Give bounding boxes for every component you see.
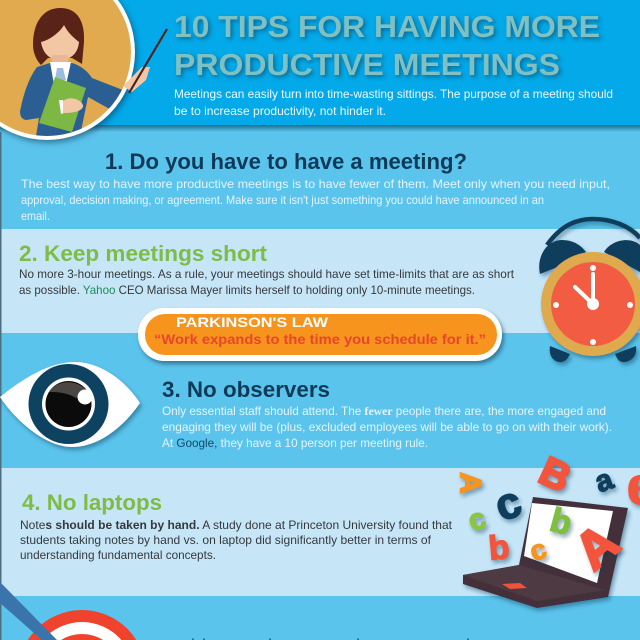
text: tip 3 body: At Google, they have a 10 person per meeting rule. xyxy=(162,436,428,450)
text: tip 4 body: understanding fundamental concepts. xyxy=(20,548,216,562)
heading: tip 1: 1. Do you have to have a meeting? xyxy=(105,149,467,174)
text: tip 3 body xyxy=(162,404,612,450)
text: tip 1 body: The best way to have more productive meetings is to have fewer of them. Meet only when you need input, xyxy=(21,177,610,191)
icon: laptop with flying letters: a xyxy=(591,463,618,499)
icon: laptop with flying letters: c xyxy=(488,477,528,531)
intro text: be to increase productivity, not hinder it. xyxy=(174,104,386,118)
icon: presenter woman with pointer xyxy=(0,0,167,140)
icon: alarm clock xyxy=(539,219,640,362)
icon: laptop with flying letters: b xyxy=(487,528,511,568)
text: tip 4 body: Notes should be taken by hand. A study done at Princeton University found that xyxy=(20,518,453,532)
text: tip 1 body xyxy=(21,177,610,223)
icon: laptop with flying letters: B xyxy=(533,449,577,501)
intro text: Meetings can easily turn into time-wasting sittings. The purpose of a meeting should xyxy=(174,87,613,101)
title xyxy=(174,9,600,82)
callout: Parkinson's Law xyxy=(138,308,502,361)
title: 10 TIPS FOR HAVING MORE xyxy=(174,9,600,44)
title: PRODUCTIVE MEETINGS xyxy=(174,47,560,82)
icon: laptop with flying letters: c xyxy=(464,502,490,538)
callout: Parkinson's Law: PARKINSON'S LAW xyxy=(176,314,329,330)
heading: tip 4: 4. No laptops xyxy=(22,490,162,515)
icon: laptop with flying letters: A xyxy=(454,472,486,494)
icon: laptop with flying letters: c xyxy=(525,533,551,567)
icon: laptop with flying letters: b xyxy=(546,501,576,543)
text: tip 4 body: students taking notes by hand vs. on laptop did significantly better in terms of xyxy=(20,533,432,547)
heading: tip 3: 3. No observers xyxy=(162,377,330,402)
icon: laptop with flying letters: A xyxy=(564,513,630,581)
callout: Parkinson's Law: “Work expands to the time you schedule for it.” xyxy=(154,331,486,347)
text: tip 1 body: email. xyxy=(21,209,50,223)
heading: tip 5 cropped at page edge xyxy=(192,638,469,640)
text: tip 1 body: approval, decision making, or agreement. Make sure it isn't just something you could have announced in an xyxy=(21,193,544,207)
panel: header band xyxy=(0,0,640,132)
icon: eye xyxy=(0,362,140,447)
text: tip 2 body: No more 3-hour meetings. As a rule, your meetings should have set time-limits that are as short xyxy=(19,267,515,281)
text: tip 3 body: engaging they will be (plus, excluded employees will be able to go on with their work). xyxy=(162,420,612,434)
heading: tip 2: 2. Keep meetings short xyxy=(19,241,268,266)
icon: laptop with flying letters xyxy=(454,449,640,608)
text: tip 4 body xyxy=(20,518,453,562)
icon: target with arrow shaft xyxy=(0,582,136,640)
intro text xyxy=(174,87,613,118)
text: tip 3 body: Only essential staff should attend. The fewer people there are, the more engaged and xyxy=(162,404,606,418)
text: tip 2 body: as possible. Yahoo CEO Marissa Mayer limits herself to holding only 10-minute meetings. xyxy=(19,283,475,297)
text: tip 2 body xyxy=(19,267,515,297)
